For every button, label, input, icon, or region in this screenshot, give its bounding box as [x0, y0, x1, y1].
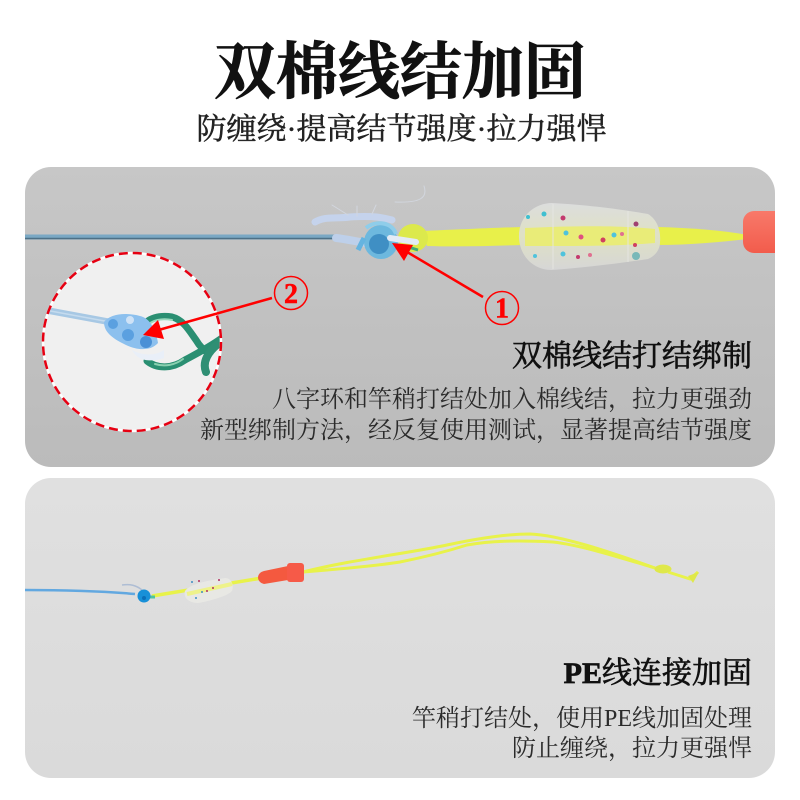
description — [200, 386, 752, 444]
yellow braided line — [423, 227, 748, 246]
callout 1 number — [486, 292, 518, 324]
title: 双棉线结加固 — [214, 39, 586, 107]
heading: PE线连接加固 — [564, 657, 752, 690]
description: 竿稍打结处，使用PE线加固处理 — [412, 705, 752, 732]
blue knot — [358, 223, 416, 259]
photo: fishing line with knot and bead — [25, 186, 793, 270]
panel: double cotton knot binding — [25, 167, 793, 467]
heading: 双棉线结打结绑制 — [512, 340, 752, 373]
description: 八字环和竿稍打结处加入棉线结，拉力更强劲 — [272, 386, 752, 413]
end knot — [654, 564, 699, 583]
subtitle: 防缠绕·提高结节强度·拉力强悍 — [197, 113, 606, 146]
callout 1 arrow — [392, 243, 483, 297]
description: 新型绑制方法，经反复使用测试，显著提高结节强度 — [200, 417, 752, 444]
panel background — [25, 478, 775, 778]
panel background — [25, 167, 775, 467]
blue line in inset — [45, 310, 110, 322]
panel: PE line reinforcement — [25, 478, 775, 778]
red stopper — [258, 563, 304, 584]
detail circle inset — [43, 253, 222, 431]
blue main line — [25, 237, 335, 238]
yellow double line — [303, 534, 698, 579]
description — [412, 705, 752, 762]
callout 2 number: 2 — [284, 279, 298, 310]
blue knot — [138, 590, 155, 602]
yellow line to bobber — [152, 578, 262, 596]
red stopper — [743, 211, 775, 253]
green figure-eight ring — [143, 316, 222, 372]
cotton fibre tufts — [315, 186, 425, 243]
description: 防止缠绕，拉力更强悍 — [512, 735, 752, 762]
clear bobber — [185, 578, 233, 603]
photo: full rig — [25, 534, 699, 603]
callout 2 arrow — [143, 298, 272, 339]
fibres — [122, 585, 142, 590]
blue line — [25, 590, 135, 594]
callout 1 number: 1 — [495, 294, 509, 324]
yellow loop knot — [398, 224, 428, 252]
blue knot in inset — [104, 314, 164, 360]
callout 2 number — [274, 276, 308, 310]
clear speckled bobber — [519, 203, 660, 270]
